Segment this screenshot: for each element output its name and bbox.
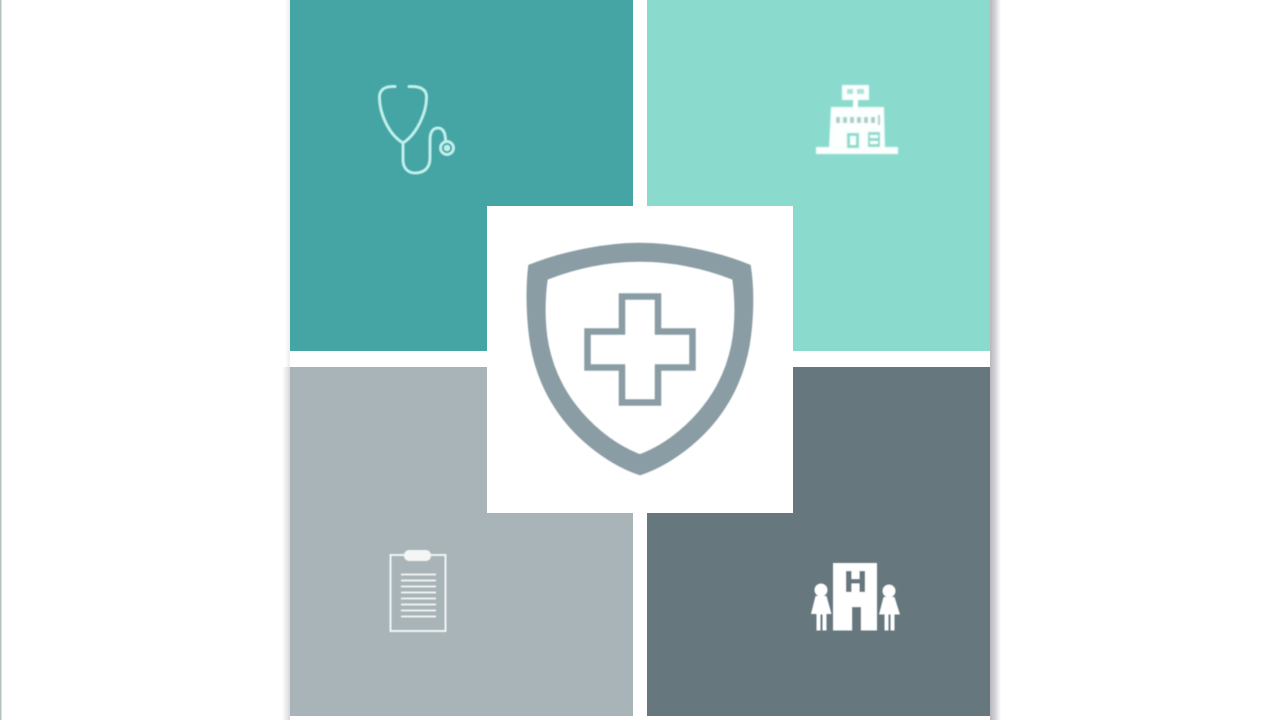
icon: clipboard: [390, 550, 446, 631]
panel: teal top-left: [290, 0, 633, 351]
panel: grey bottom-left: [290, 367, 633, 716]
icon: stethoscope: [379, 86, 454, 173]
icon: shield with medical cross: [527, 244, 753, 474]
shield outline: [527, 244, 753, 474]
panel: central white square: [487, 206, 793, 513]
panel: mint top-right: [647, 0, 990, 351]
medical cross: [588, 296, 692, 402]
icon: clinic building: [816, 85, 898, 154]
icon: hospital with two people: [811, 563, 900, 631]
panel: slate bottom-right: [647, 367, 990, 716]
